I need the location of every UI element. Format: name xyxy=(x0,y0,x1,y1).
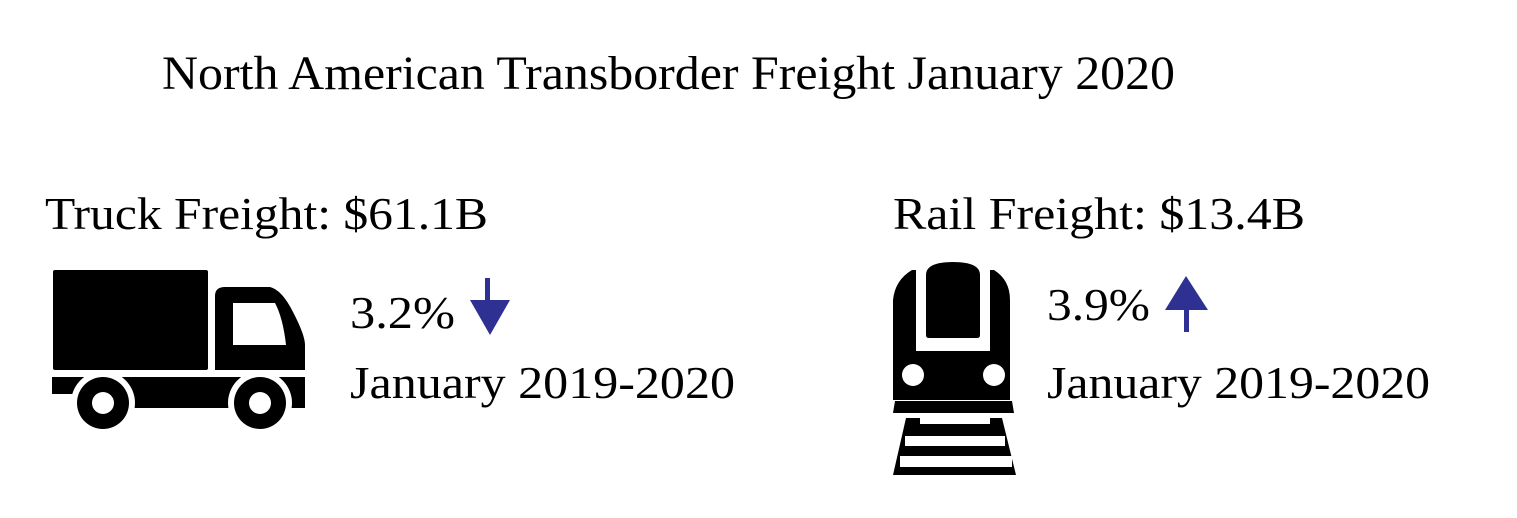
panel: rail xyxy=(893,188,1430,475)
text: period: January 2019-2020 xyxy=(1047,357,1430,408)
arrow: down xyxy=(470,278,510,335)
icon: train xyxy=(893,262,1016,475)
arrow: up xyxy=(1165,276,1208,332)
stat: 3.9%: 3.9% xyxy=(1047,279,1150,330)
heading: rail freight: Rail Freight: $13.4B xyxy=(893,188,1305,239)
panel: truck xyxy=(45,188,735,435)
icon: truck xyxy=(52,270,305,435)
text: period: January 2019-2020 xyxy=(350,357,735,408)
title: North American Transborder Freight January 2020 xyxy=(162,47,1175,100)
heading: truck freight: Truck Freight: $61.1B xyxy=(45,188,488,239)
stat: 3.2%: 3.2% xyxy=(350,287,455,338)
